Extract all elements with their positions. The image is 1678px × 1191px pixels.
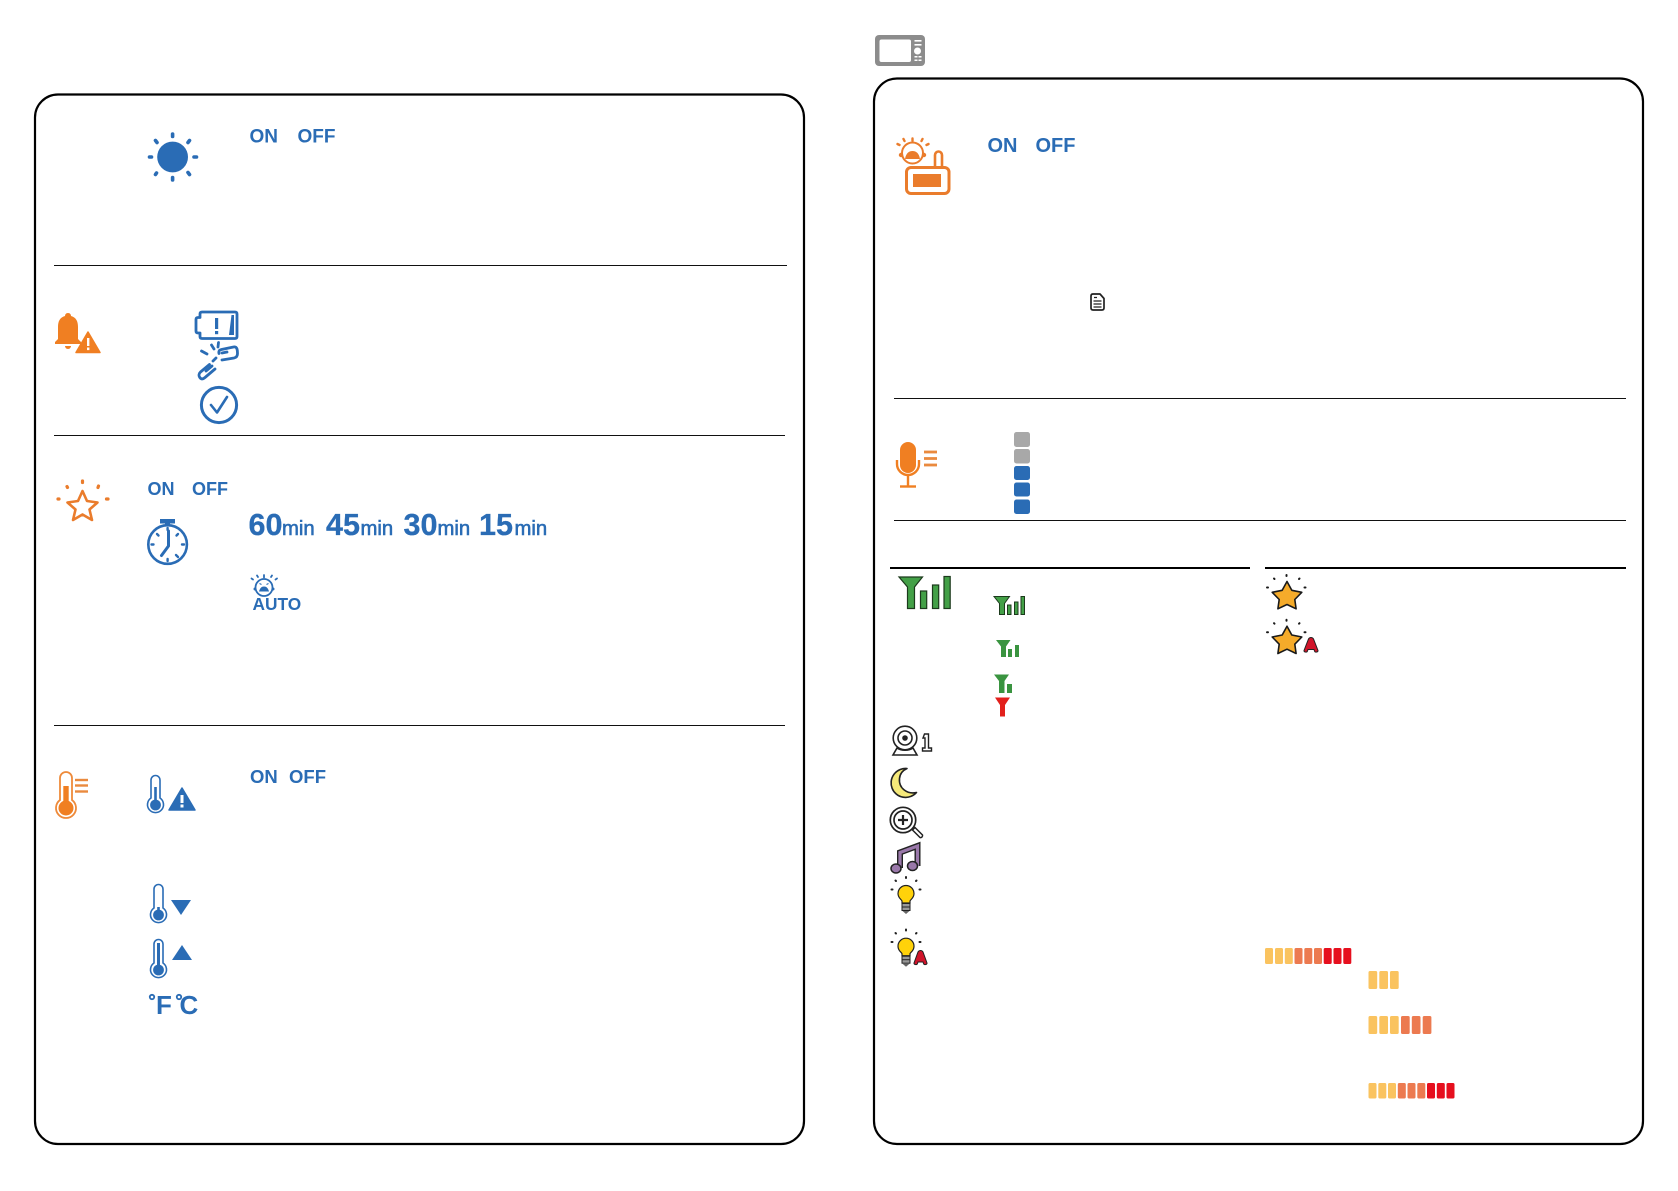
icon: brightness sun bbox=[150, 134, 196, 180]
icon: star auto bbox=[1267, 620, 1318, 654]
icon: auto cry detection: AUTO bbox=[252, 594, 301, 614]
text: temperature on off: ON bbox=[250, 766, 278, 787]
text: brightness on off: ON bbox=[250, 126, 278, 148]
icon: temperature alert bbox=[148, 776, 195, 813]
text: temperature units bbox=[150, 990, 198, 1020]
text: timer durations: 30 bbox=[404, 508, 437, 542]
icon: moon bbox=[891, 768, 916, 797]
icon: signal strong bbox=[994, 596, 1024, 614]
text: timer durations: min bbox=[514, 518, 547, 540]
level bar: full scale bbox=[1265, 948, 1351, 964]
icon: signal large bbox=[899, 576, 950, 608]
icon: magnifier zoom bbox=[890, 807, 923, 838]
icon: auto night light bbox=[892, 930, 927, 967]
text: cry detection on off: OFF bbox=[1036, 135, 1076, 157]
icon: parent unit bbox=[875, 35, 925, 66]
icon: star favourite bbox=[1267, 575, 1306, 609]
icon: microphone bbox=[897, 442, 937, 486]
icon: night light bbox=[892, 877, 920, 914]
icon: orange sparkle star bbox=[58, 481, 108, 520]
icon: cry detection monitor bbox=[898, 138, 949, 194]
level bar: low bbox=[1368, 971, 1399, 989]
icon: alert bell bbox=[55, 313, 100, 352]
icon: signal low bbox=[994, 674, 1012, 693]
icon: broken link bbox=[199, 342, 238, 379]
text: cry detection on off: ON bbox=[988, 135, 1018, 157]
text: timer on off: ON bbox=[148, 479, 174, 499]
icon: high temperature bbox=[150, 940, 192, 978]
text: timer on off: OFF bbox=[192, 479, 228, 499]
text: brightness on off: OFF bbox=[298, 126, 336, 148]
text: temperature units: F bbox=[156, 990, 172, 1020]
panel: left settings bbox=[35, 94, 804, 1144]
text: timer durations: min bbox=[360, 518, 393, 540]
text: timer durations: 60 bbox=[248, 508, 282, 542]
icon: music note bbox=[891, 846, 918, 873]
icon: auto cry detection bbox=[252, 575, 301, 614]
level bar: high bbox=[1368, 1083, 1454, 1098]
icon: no signal bbox=[995, 698, 1010, 716]
icon: document bbox=[1091, 294, 1104, 310]
panel: right settings bbox=[874, 78, 1643, 1144]
text: timer durations: min bbox=[282, 518, 315, 540]
text: timer durations bbox=[248, 508, 547, 542]
icon: camera number bbox=[893, 726, 932, 755]
icon: orange thermometer with lines bbox=[56, 772, 88, 818]
icon: signal medium bbox=[996, 640, 1019, 657]
text: temperature on off: OFF bbox=[289, 766, 326, 787]
volume level bars bbox=[1014, 432, 1030, 514]
text: timer durations: 45 bbox=[326, 508, 360, 542]
icon: low battery bbox=[196, 312, 237, 338]
text: temperature units: C bbox=[180, 990, 198, 1020]
icon: stopwatch bbox=[148, 519, 187, 564]
text: timer durations: 15 bbox=[479, 508, 513, 542]
icon: check circle bbox=[201, 387, 237, 423]
level bar: medium bbox=[1368, 1016, 1431, 1034]
icon: low temperature bbox=[150, 884, 191, 923]
text: timer durations: min bbox=[438, 518, 470, 540]
